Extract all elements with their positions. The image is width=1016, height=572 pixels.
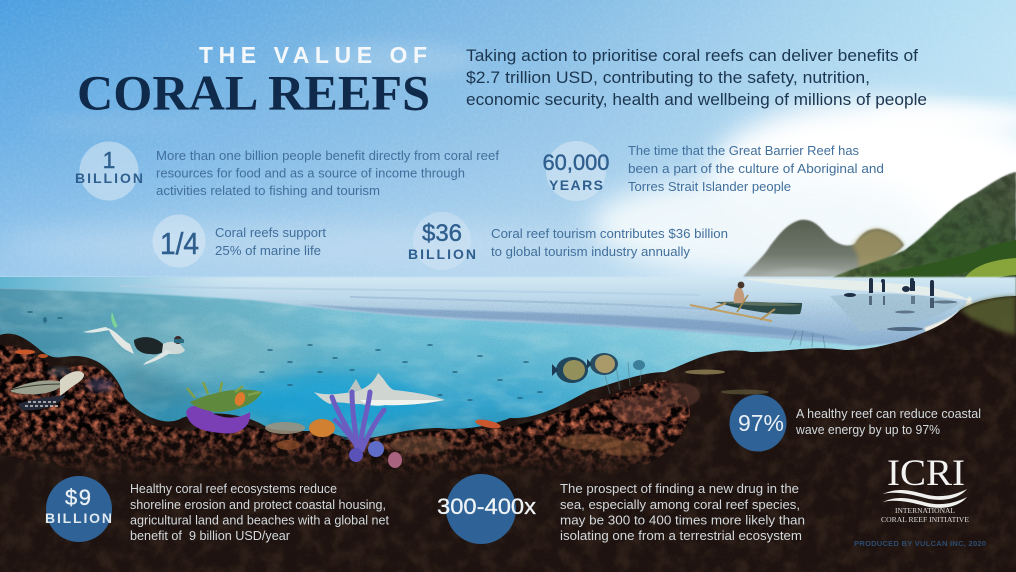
illustration: reef and dark sea floor (0, 296, 1016, 572)
icon: shark (314, 373, 445, 406)
stat: 60,000 years: YEARS (549, 177, 603, 193)
stat: $9 billion: shoreline erosion and protect coastal housing, (130, 498, 386, 512)
stat: 300-400x (437, 474, 805, 544)
credit: PRODUCED BY VULCAN INC, 2020 (854, 539, 986, 548)
stat: $36 billion: Coral reef tourism contributes $36 billion (491, 226, 728, 241)
stat: 1 billion: 1 (103, 147, 115, 173)
stat: 1 billion: More than one billion people benefit directly from coral reef (156, 148, 499, 163)
logo: ICRI: INTERNATIONAL (895, 506, 955, 515)
stat: 300-400x: The prospect of finding a new drug in the (560, 482, 799, 496)
stat: 1 billion: BILLION (75, 170, 143, 186)
logo: ICRI: ICRI (887, 453, 965, 494)
coral band (0, 330, 825, 480)
intro text: Taking action to prioritise coral reefs can deliver benefits of (466, 46, 918, 65)
stat: $9 billion: $9 (65, 485, 91, 510)
intro text (466, 46, 927, 109)
stat: 60,000 years (542, 141, 884, 201)
stat: $9 billion (45, 476, 390, 543)
stat: 60,000 years: been a part of the culture of Aboriginal and (628, 161, 884, 176)
illustration: underwater (0, 282, 1000, 470)
stat: $36 billion: BILLION (408, 246, 476, 262)
stat: 97 percent: wave energy by up to 97% (795, 423, 940, 437)
stat: one quarter: 1/4 (160, 226, 199, 261)
illustration: green headland (830, 172, 1016, 300)
icon: angelfish (552, 353, 645, 383)
stat: 1 billion: resources for food and as a source of income through (156, 166, 465, 180)
title: CORAL REEFS (77, 64, 430, 120)
school of small fish (27, 311, 643, 411)
stat: 1 billion (75, 142, 499, 200)
stat: 300-400x: sea, especially among coral reef species, (560, 498, 800, 512)
stat: one quarter: Coral reefs support (215, 225, 326, 240)
background: sky (0, 0, 1016, 282)
stat: $36 billion: to global tourism industry annually (491, 244, 690, 259)
stat: 97 percent (730, 394, 981, 452)
stat: $36 billion (408, 212, 728, 270)
stat: 60,000 years: 60,000 (542, 150, 610, 175)
icon: outrigger canoe (690, 282, 802, 321)
illustration: distant mountain (743, 220, 904, 277)
stat: $36 billion: $36 (422, 220, 462, 247)
icon: anemone (186, 382, 262, 433)
illustration: sea surface (0, 277, 1016, 346)
stat: 300-400x: may be 300 to 400 times more likely than (560, 514, 805, 528)
stat: $9 billion: BILLION (45, 510, 112, 526)
stat: 300-400x: 300-400x (437, 494, 536, 519)
stat: one quarter: 25% of marine life (215, 243, 321, 258)
icon: sea turtle (10, 371, 84, 410)
stat: 97 percent: 97% (738, 410, 784, 436)
logo: ICRI: CORAL REEF INITIATIVE (881, 515, 969, 524)
stat: 97 percent: A healthy reef can reduce coastal (796, 407, 981, 421)
stat: 60,000 years: The time that the Great Barrier Reef has (628, 143, 859, 158)
title: THE VALUE OF (199, 42, 427, 68)
stat: $9 billion: agricultural land and beaches with a global net (130, 514, 390, 528)
intro text: economic security, health and wellbeing of millions of people (466, 90, 927, 109)
icon: people on the beach (844, 278, 957, 331)
stat: $9 billion: Healthy coral reef ecosystems reduce (130, 482, 337, 496)
icon: snorkeler (83, 312, 185, 365)
stat: 60,000 years: Torres Strait Islander people (628, 179, 791, 194)
stat: $9 billion: benefit of 9 billion USD/year (130, 529, 290, 543)
icon: purple sea fan (332, 392, 402, 468)
stat: 300-400x: isolating one from a terrestrial ecosystem (560, 529, 802, 543)
logo: ICRI (881, 453, 969, 524)
stat: one quarter (152, 214, 326, 268)
stat: 1 billion: activities related to fishing and tourism (156, 183, 380, 198)
intro text: $2.7 trillion USD, contributing to the safety, nutrition, (466, 68, 870, 87)
